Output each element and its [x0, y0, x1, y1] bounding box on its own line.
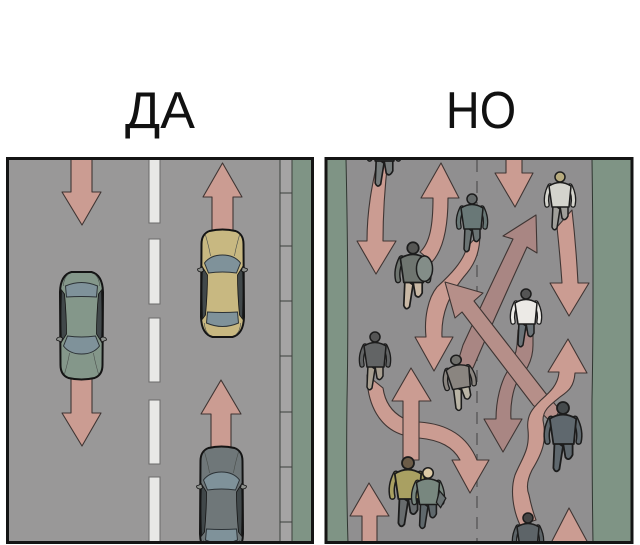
pedestrian: top-left legs	[367, 160, 401, 187]
arrow: S-curve down from grey man	[415, 233, 480, 371]
pedestrian: right man	[547, 402, 579, 471]
pedestrian: blonde woman with bag	[414, 468, 446, 528]
pedestrian: left man	[361, 332, 389, 390]
car: grey	[196, 446, 246, 545]
right green verge	[592, 159, 632, 543]
pedestrian: bottom man	[514, 513, 542, 545]
car: green	[56, 272, 106, 380]
frame: right panel	[326, 158, 632, 542]
arrow: top-left curved down	[357, 159, 396, 274]
arrow: down, left lane top	[62, 159, 101, 225]
arrow: curved up from backpack pedestrian	[420, 163, 459, 262]
pedestrian: grey man	[458, 194, 486, 252]
arrow: vertical up, left centre	[392, 368, 431, 460]
arrow: curved down from white shirt pedestrian	[484, 330, 533, 452]
arrow: up, above grey car	[201, 380, 241, 447]
centre dashed lane line	[149, 159, 160, 543]
curb and grass verge	[280, 159, 312, 543]
pedestrian: woman with light top	[546, 172, 574, 230]
arrow: right, down from woman	[550, 210, 589, 316]
title: ДА: ДА	[125, 82, 195, 140]
title: НО: НО	[446, 82, 516, 140]
pedestrian: white shirt	[512, 289, 540, 347]
pedestrian: backpack	[397, 242, 433, 309]
left green verge	[326, 159, 348, 543]
panel: road with lanes (ДА)	[7, 159, 312, 545]
arrow: diagonal up-right	[456, 215, 537, 368]
pedestrian: centre woman	[442, 354, 477, 412]
arrow: wavy up, right side	[513, 339, 587, 525]
arrow: curved right from left pedestrian	[367, 375, 489, 493]
arrow: long diagonal up-left	[445, 282, 560, 423]
arrow: down, top centre	[495, 159, 533, 207]
arrow: bottom-left up	[350, 483, 389, 543]
backpack	[416, 256, 433, 281]
frame: left panel	[8, 158, 312, 542]
arrow: up, above yellow car	[203, 163, 242, 232]
arrow: bottom-right up	[551, 508, 588, 543]
handbag	[436, 491, 446, 508]
panel: chaotic sidewalk (НО)	[328, 160, 630, 541]
arrow: down, below green car	[62, 378, 101, 446]
pedestrian: man in yellow shirt	[392, 457, 424, 526]
centre dashed line	[476, 160, 478, 543]
car: yellow	[198, 230, 248, 337]
